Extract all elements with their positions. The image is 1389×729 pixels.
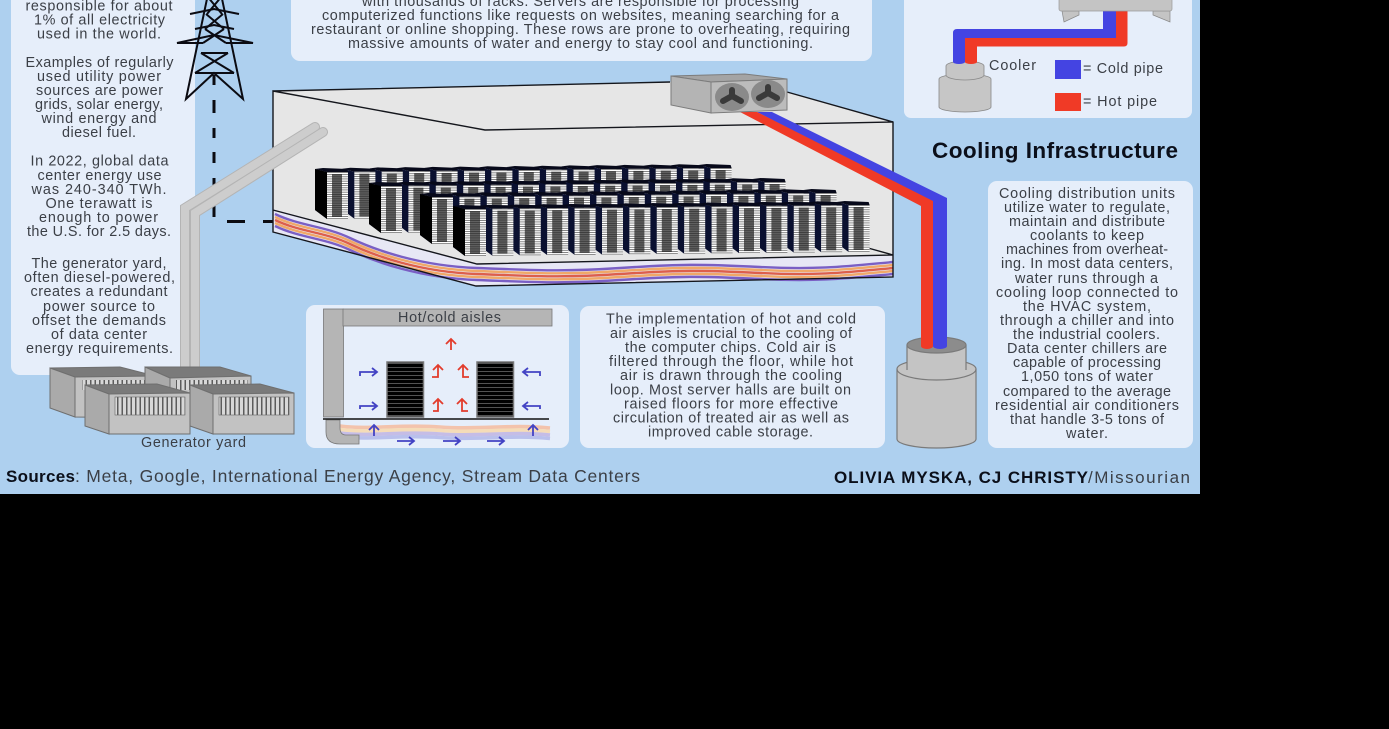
panel: cooling text: 1,050 tons of water (1021, 369, 1153, 385)
panel: left power text: In 2022, global data (30, 154, 168, 170)
generator back right (145, 367, 251, 410)
panel: hot/cold aisle text: air aisles is crucial to the cooling of (610, 326, 853, 342)
panel: left power text: One terawatt is (46, 196, 152, 212)
rack right (477, 362, 514, 417)
panel: cooling text: the industrial coolers. (1013, 327, 1160, 343)
cold air arrows (360, 368, 540, 445)
cold pipe legend: = Cold pipe (1083, 61, 1163, 77)
panel: cooling text: the HVAC system, (1023, 299, 1151, 315)
panel: hot/cold aisle text: air is drawn through the cooling (620, 368, 842, 384)
panel: server hall text (291, 0, 872, 61)
panel: cooling text: water runs through a (1014, 271, 1158, 287)
panel: left power text: enough to power (39, 210, 158, 226)
panel: left power text: Examples of regularly (26, 55, 174, 71)
panel: cooling text: residential air conditioners (995, 398, 1179, 414)
generator front right (190, 384, 294, 434)
panel: hot/cold aisle text: loop. Most server halls are built on (610, 382, 851, 398)
panel: left power text (11, 0, 195, 375)
panel: hot/cold aisle text: the computer chips. Cold air is (625, 340, 836, 356)
generator front left (85, 384, 190, 434)
panel: hot/cold aisle text (580, 306, 885, 448)
panel: left power text: offset the demands (32, 313, 166, 329)
icon: rooftop cooling unit (671, 74, 787, 113)
panel: left power text: used in the world. (37, 26, 161, 42)
panel: left power text: wind energy and (40, 111, 156, 127)
generator back left (50, 367, 155, 418)
infographic canvas (0, 0, 1200, 494)
panel: left power text: sources are power (36, 83, 163, 99)
panel: left power text: creates a redundant (30, 284, 168, 300)
panel: left power text: was 240-340 TWh. (30, 182, 166, 198)
panel: cooling text: cooling loop connected to (996, 285, 1178, 301)
hot air arrows (432, 339, 469, 411)
exhaust pipes (185, 127, 323, 372)
panel: cooling text: that handle 3-5 tons of (1010, 412, 1165, 428)
panel: left power text: the U.S. for 2.5 days. (27, 224, 171, 240)
panel: cooling text: capable of processing (1013, 355, 1161, 371)
credits: /Missourian (1088, 468, 1190, 487)
panel: cooling text: Data center chillers are (1007, 341, 1167, 357)
hot pipe legend (1055, 93, 1157, 111)
panel: left power text: 1% of all electricity (34, 12, 166, 28)
rack left (387, 362, 424, 417)
panel: left power text: diesel fuel. (62, 125, 136, 141)
panel: hot/cold aisle text: circulation of treated air as well as (613, 410, 849, 426)
panel: cooling text (988, 181, 1193, 448)
panel: hot/cold aisle text: filtered through the floor, while hot (609, 354, 853, 370)
panel: cooling text: through a chiller and into (1000, 313, 1174, 329)
aisle title: Hot/cold aisles (398, 310, 501, 326)
generator yard label: Generator yard (141, 435, 246, 451)
panel: cooling text: ing. In most data centers, (1001, 256, 1173, 272)
panel: server hall text: computerized functions like requests on websites, meaning searching for a (322, 8, 839, 24)
sources: Sources (6, 467, 75, 486)
panel: hot/cold aisle text: raised floors for more effective (624, 396, 838, 412)
panel: server hall text: massive amounts of water and energy to stay cool and functioning. (348, 36, 813, 52)
cold pipe legend (1055, 60, 1163, 79)
panel: left power text: power source to (43, 299, 155, 315)
sources: : Meta, Google, International Energy Agency, Stream Data Centers (75, 466, 640, 486)
panel: server hall text: restaurant or online shopping. These rows are prone to overheating, requiring (311, 22, 850, 38)
panel: cooling text: Cooling distribution units (999, 186, 1175, 202)
panel: left power text: The generator yard, (32, 256, 166, 272)
panel: left power text: of data center (51, 327, 147, 343)
icon: transmission tower (177, 0, 253, 99)
panel: cooling text: coolants to keep (1030, 228, 1144, 244)
panel: cooling text: maintain and distribute (1009, 214, 1165, 230)
panel: cooling text: water. (1065, 426, 1108, 442)
panel: cooling loop legend (904, 0, 1192, 118)
heading: cooling infrastructure: Cooling Infrastructure (932, 138, 1178, 163)
cooler label: Cooler (989, 58, 1036, 74)
panel: hot/cold aisles diagram (306, 305, 569, 448)
panel: cooling text: compared to the average (1003, 384, 1171, 400)
icon: large cooler (897, 335, 976, 448)
panel: left power text: energy requirements. (26, 341, 173, 357)
hot and cold pipes to cooler (740, 112, 947, 345)
credits: OLIVIA MYSKA, CJ CHRISTY (834, 468, 1089, 487)
panel: left power text: used utility power (37, 69, 161, 85)
panel: cooling text: machines from overheat- (1006, 242, 1168, 258)
panel: cooling text: utilize water to regulate, (1004, 200, 1170, 216)
server rack rows (315, 164, 870, 256)
panel: hot/cold aisle text: improved cable storage. (648, 424, 813, 440)
server hall building (273, 82, 893, 286)
hot pipe legend: = Hot pipe (1083, 94, 1157, 110)
panel: left power text: often diesel-powered, (24, 270, 175, 286)
icon: generator yard (50, 367, 294, 434)
panel: left power text: center energy use (38, 168, 162, 184)
panel: left power text: grids, solar energy, (35, 97, 163, 113)
power line dashed (214, 75, 273, 222)
panel: hot/cold aisle text: The implementation of hot and cold (606, 312, 856, 328)
